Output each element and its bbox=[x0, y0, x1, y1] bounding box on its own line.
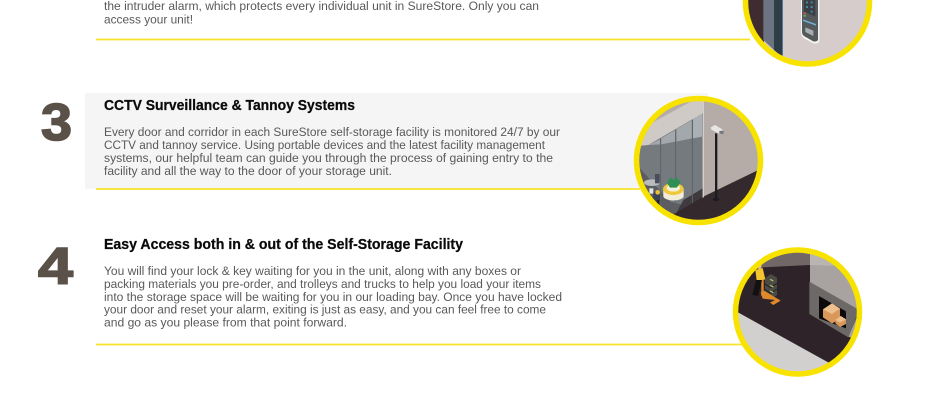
text block: step 4 description: into the storage space will be waiting for you in our loading bay. Once you have locked bbox=[104, 290, 562, 304]
text block: step 4 description: You will find your lock & key waiting for you in the unit, along with any boxes or bbox=[104, 264, 521, 278]
text block: step 3 description bbox=[104, 125, 560, 178]
icon: CCTV camera illustration bbox=[634, 96, 764, 226]
panel: step 3 CCTV surveillance bbox=[41, 90, 770, 230]
icon: door keypad illustration bbox=[740, 0, 875, 70]
text block: step 2 description: access your unit! bbox=[104, 12, 193, 26]
icon: loading bay illustration bbox=[732, 247, 862, 377]
text block: step 3 description: Every door and corridor in each SureStore self-storage facility is monitored 24/7 by our bbox=[104, 125, 560, 139]
heading: Easy Access both in & out of the Self-Storage Facility: Easy Access both in & out of the Self-Storage Facility bbox=[104, 237, 463, 253]
text block: step 4 description: and go as you please from that point forward. bbox=[104, 316, 347, 330]
number: 3: 3 bbox=[41, 94, 72, 152]
text block: step 3 description: facility and all the way to the door of your storage unit. bbox=[104, 164, 392, 178]
panel: step 4 easy access bbox=[38, 237, 867, 383]
text block: step 2 description bbox=[104, 0, 539, 26]
text block: step 4 description: packing materials you pre-order, and trolleys and trucks to help you load your items bbox=[104, 277, 541, 291]
text block: step 3 description: systems, our helpful team can guide you through the process of gaining entry to the bbox=[104, 151, 553, 165]
heading: CCTV Surveillance & Tannoy Systems: CCTV Surveillance & Tannoy Systems bbox=[104, 98, 355, 114]
text block: step 4 description: your door and reset your alarm, exiting is just as easy, and you can feel free to come bbox=[104, 302, 546, 316]
text block: step 4 description bbox=[104, 264, 562, 330]
number: 4: 4 bbox=[38, 238, 73, 296]
text block: step 3 description: CCTV and tannoy service. Using portable devices and the latest facility management bbox=[104, 138, 546, 152]
panel: step 2 intruder alarm (continued) bbox=[96, 0, 875, 70]
